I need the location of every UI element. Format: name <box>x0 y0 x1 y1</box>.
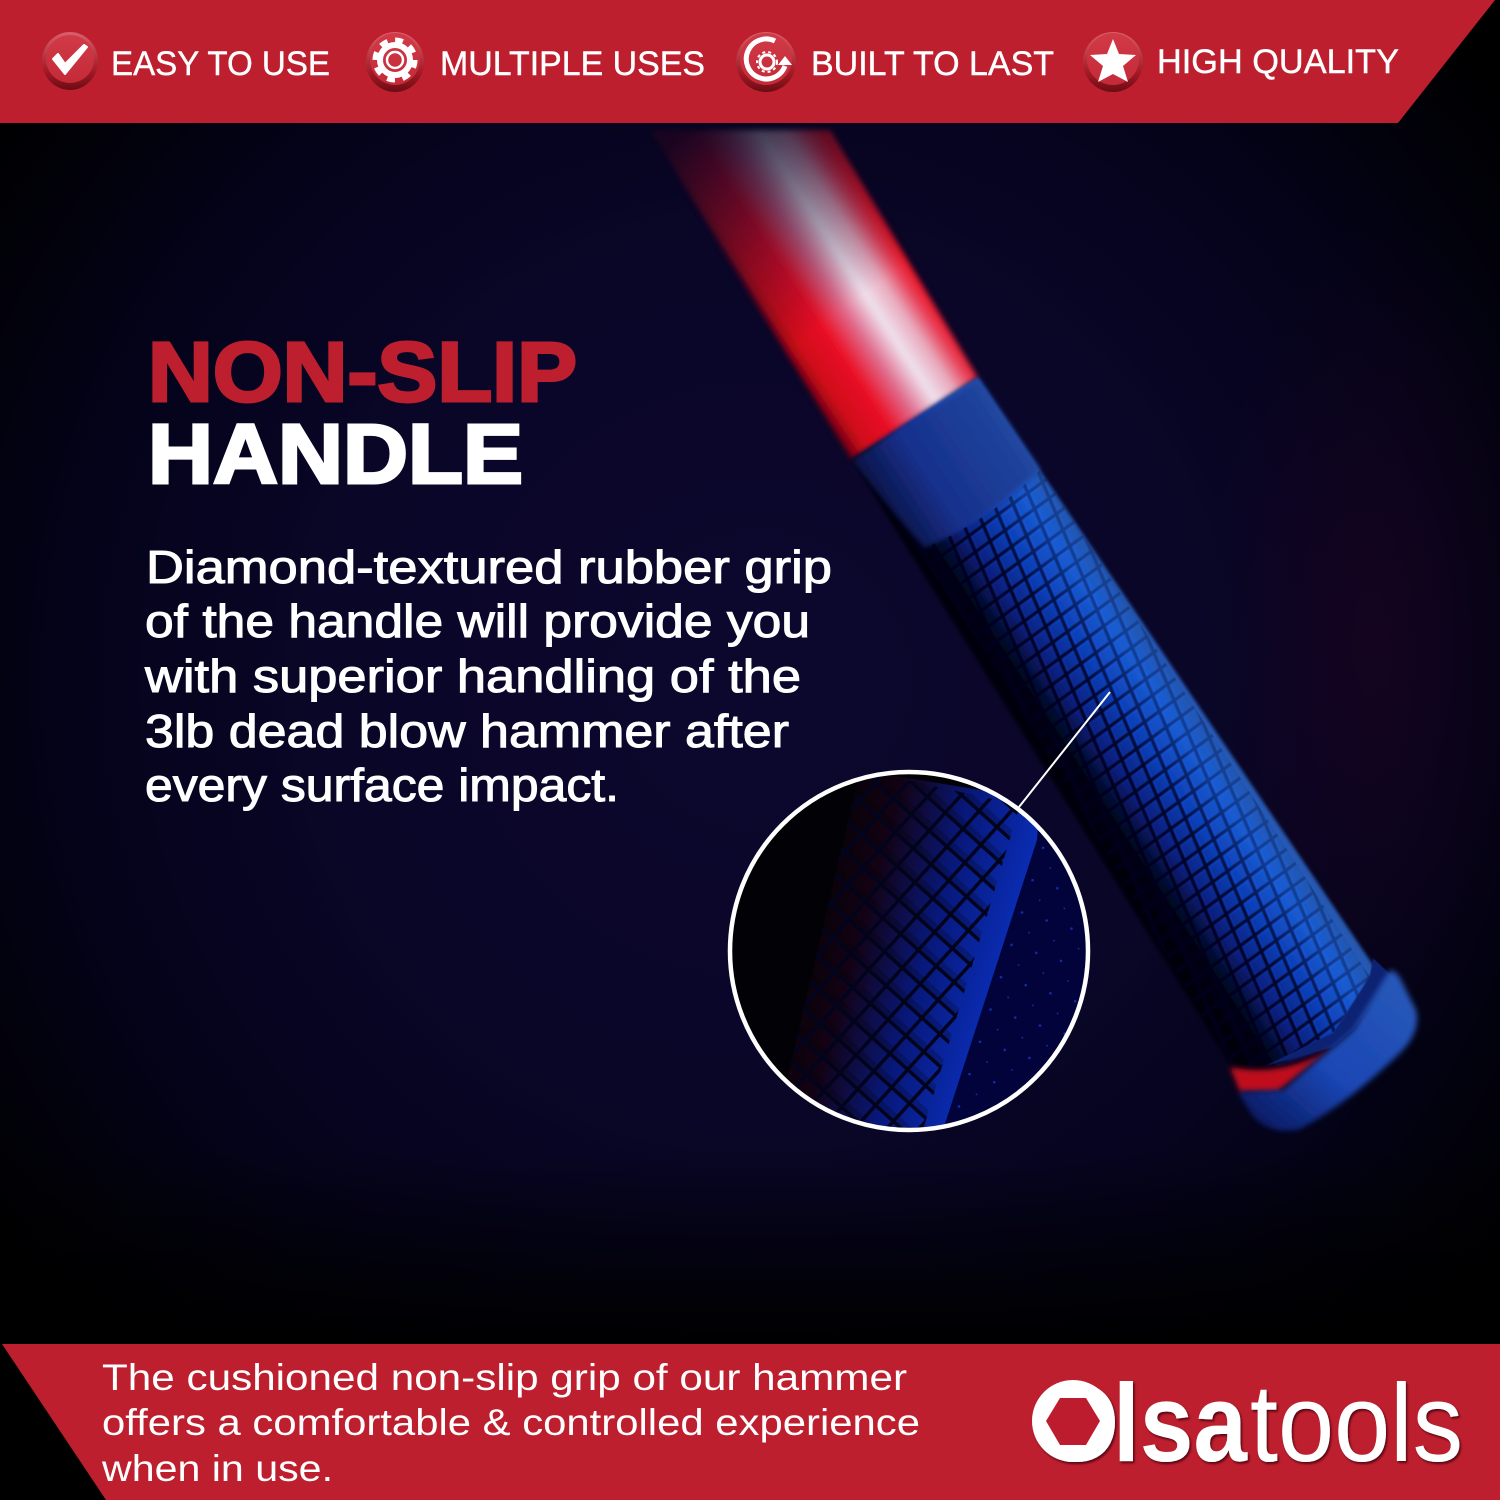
heading: NON-SLIP <box>148 325 577 419</box>
body text: of the handle will provide you <box>145 595 810 647</box>
icon: cycle gear <box>736 32 796 92</box>
icon: check mark <box>42 32 98 90</box>
leader line <box>1019 692 1110 807</box>
hammer handle photo <box>650 130 1417 1131</box>
footer text: when in use. <box>101 1448 333 1489</box>
logo: Olsatools: O <box>1034 1362 1120 1485</box>
dotted dark region <box>945 830 1086 1124</box>
logo: Olsatools: tools <box>1250 1362 1463 1485</box>
icon: gear <box>366 32 424 92</box>
label: built to last: BUILT TO LAST <box>811 45 1054 83</box>
bottom banner <box>2 1344 1500 1500</box>
logo: Olsatools <box>1032 1362 1463 1485</box>
body text: every surface impact. <box>145 759 619 811</box>
heading: HANDLE <box>148 407 523 501</box>
zoom circle: grip detail <box>730 770 1100 1140</box>
footer text: The cushioned non-slip grip of our hammer <box>102 1357 907 1398</box>
label: multiple uses: MULTIPLE USES <box>440 45 705 83</box>
icon: star <box>1083 32 1143 92</box>
footer text <box>101 1357 920 1489</box>
blue rubber grip <box>852 378 1400 1100</box>
body text: Diamond-textured rubber grip <box>146 541 832 593</box>
body text <box>144 541 832 811</box>
body text: with superior handling of the <box>144 650 801 702</box>
top banner <box>0 0 1495 123</box>
blue textured strip <box>775 770 1040 1130</box>
label: easy to use: EASY TO USE <box>111 45 330 83</box>
red fibreglass shaft <box>650 130 978 460</box>
body text: 3lb dead blow hammer after <box>145 705 789 757</box>
footer text: offers a comfortable & controlled experience <box>102 1402 920 1443</box>
label: high quality: HIGH QUALITY <box>1157 43 1399 81</box>
heading <box>148 325 577 501</box>
logo: Olsatools: lsa <box>1113 1362 1248 1485</box>
grip end cap <box>1230 958 1417 1131</box>
